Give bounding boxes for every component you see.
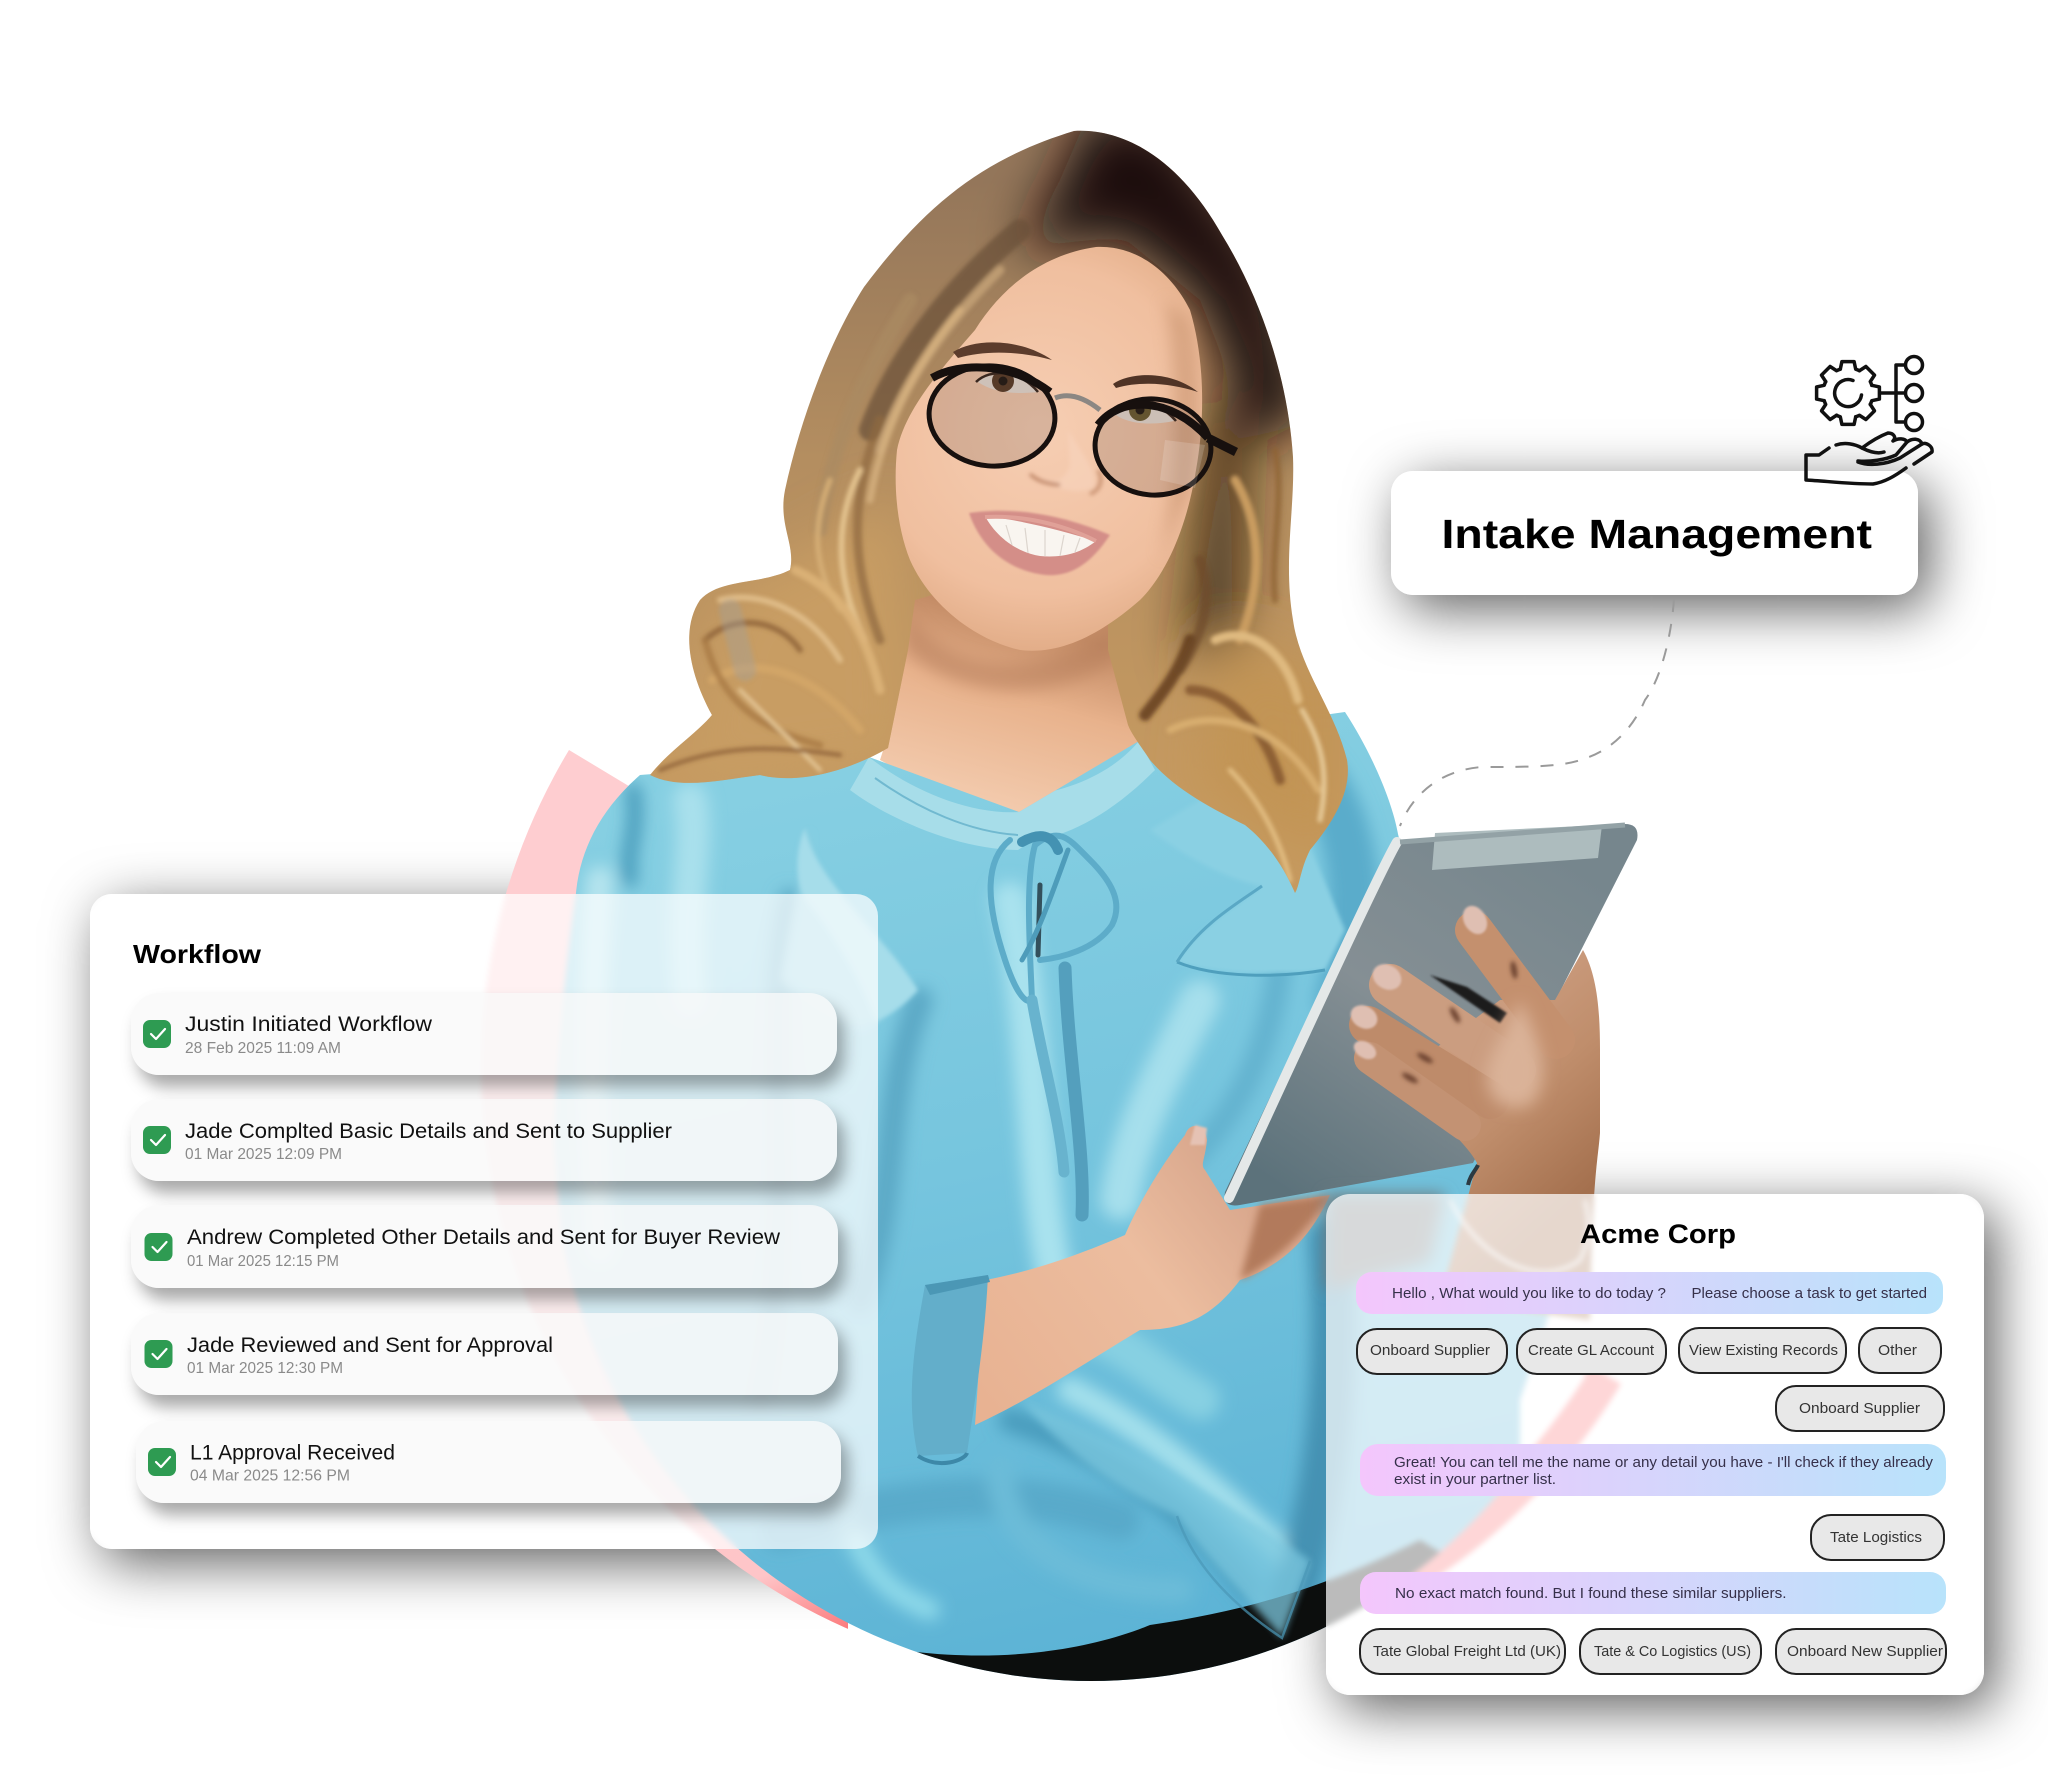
- chat bubble: ask for name: [1360, 1444, 1946, 1496]
- chip: user reply Onboard Supplier: [1776, 1386, 1944, 1431]
- workflow step: Jade Reviewed and Sent for Approval: 01 Mar 2025 12:30 PM: [187, 1360, 343, 1377]
- workflow step: Jade Reviewed and Sent for Approval: [131, 1313, 838, 1395]
- nose: [1030, 430, 1101, 494]
- blouse: [554, 712, 1550, 1681]
- chat bubble: ask for name: Great! You can tell me the name or any detail you have - I'll check if they already: [1394, 1455, 1934, 1471]
- connector: dashed line from heading to tablet: [1400, 599, 1674, 826]
- left ruffle: [784, 888, 803, 980]
- chips: similar suppliers: Tate Global Freight Ltd (UK): [1373, 1643, 1561, 1660]
- pants: [917, 1538, 1440, 1681]
- chips: similar suppliers: Tate & Co Logistics (US): [1594, 1643, 1751, 1660]
- glasses: [925, 361, 1236, 500]
- workflow step: Andrew Completed Other Details: [131, 1205, 838, 1288]
- collar: [850, 741, 1155, 850]
- chat bubble: no exact match: [1360, 1572, 1946, 1614]
- neck: [880, 595, 1138, 812]
- chat bubble: greeting: [1356, 1272, 1943, 1314]
- workflow step: Justin Initiated Workflow: 28 Feb 2025 11:09 AM: [185, 1040, 341, 1057]
- heading: Workflow: Workflow: [133, 939, 262, 969]
- chip: user reply Tate Logistics: Tate Logistics: [1830, 1529, 1922, 1546]
- workflow step: Jade Complted Basic Details: [131, 1099, 837, 1181]
- workflow step: Jade Reviewed and Sent for Approval: Jade Reviewed and Sent for Approval: [187, 1334, 553, 1357]
- eyebrows: [953, 342, 1052, 360]
- scene: pink arc, woman and connector: [482, 130, 1934, 1681]
- chips: similar suppliers: Onboard New Supplier: [1787, 1643, 1943, 1660]
- workflow step: L1 Approval Received: [136, 1421, 841, 1503]
- chips: task options: [1357, 1328, 1941, 1374]
- chips: task options: View Existing Records: [1689, 1342, 1838, 1359]
- panel: Intake Management heading: [1391, 471, 1918, 595]
- workflow step: Andrew Completed Other Details: 01 Mar 2025 12:15 PM: [187, 1253, 339, 1270]
- hair: [620, 100, 1380, 920]
- chip: user reply Tate Logistics: [1811, 1515, 1944, 1560]
- shading folds: [592, 760, 1354, 1610]
- title text: Intake Management: [1442, 511, 1872, 557]
- panel: Workflow: [90, 894, 878, 1549]
- chat bubble: ask for name: exist in your partner list.: [1394, 1472, 1556, 1488]
- workflow step: Jade Complted Basic Details: 01 Mar 2025 12:09 PM: [185, 1146, 342, 1163]
- cuff: [912, 1275, 988, 1456]
- right ruffle: [1150, 800, 1345, 973]
- smile: [969, 511, 1110, 575]
- photo: woman holding a tablet: [540, 100, 1638, 1720]
- chat bubble: greeting: Hello , What would you like to do today ?: [1392, 1286, 1666, 1302]
- panel: Acme Corp chat: [1326, 1194, 1984, 1695]
- bow tie ribbon: [991, 836, 1116, 1215]
- chips: similar suppliers: [1360, 1629, 1946, 1674]
- heading: Acme Corp: Acme Corp: [1580, 1219, 1736, 1249]
- forearm and lower hand: [975, 1126, 1330, 1425]
- lower ruffle: [1023, 1401, 1310, 1638]
- workflow step: Justin Initiated Workflow: [131, 993, 837, 1075]
- workflow step: Jade Complted Basic Details: Jade Complted Basic Details and Sent to Supplier: [185, 1120, 672, 1143]
- chips: task options: Create GL Account: [1528, 1342, 1655, 1359]
- chat bubble: no exact match: No exact match found. But I found these similar suppliers.: [1395, 1586, 1786, 1602]
- pink arc behind woman: [481, 750, 1621, 1681]
- chip: user reply Onboard Supplier: Onboard Supplier: [1799, 1400, 1920, 1417]
- tablet: [1225, 824, 1638, 1205]
- workflow step: L1 Approval Received: 04 Mar 2025 12:56 PM: [190, 1468, 350, 1484]
- chips: task options: Onboard Supplier: [1370, 1342, 1490, 1359]
- chips: task options: Other: [1878, 1342, 1917, 1359]
- chat bubble: greeting: Please choose a task to get started: [1692, 1286, 1927, 1302]
- workflow step: Andrew Completed Other Details: Andrew Completed Other Details and Sent for Buyer Review: [187, 1226, 781, 1249]
- icon: gear, network and open hand: [1804, 354, 1934, 486]
- workflow step: Justin Initiated Workflow: Justin Initiated Workflow: [185, 1013, 433, 1036]
- workflow step: L1 Approval Received: L1 Approval Received: [190, 1442, 395, 1464]
- face: [896, 247, 1202, 651]
- hand on tablet: [1346, 902, 1600, 1320]
- eyes: [976, 370, 1176, 424]
